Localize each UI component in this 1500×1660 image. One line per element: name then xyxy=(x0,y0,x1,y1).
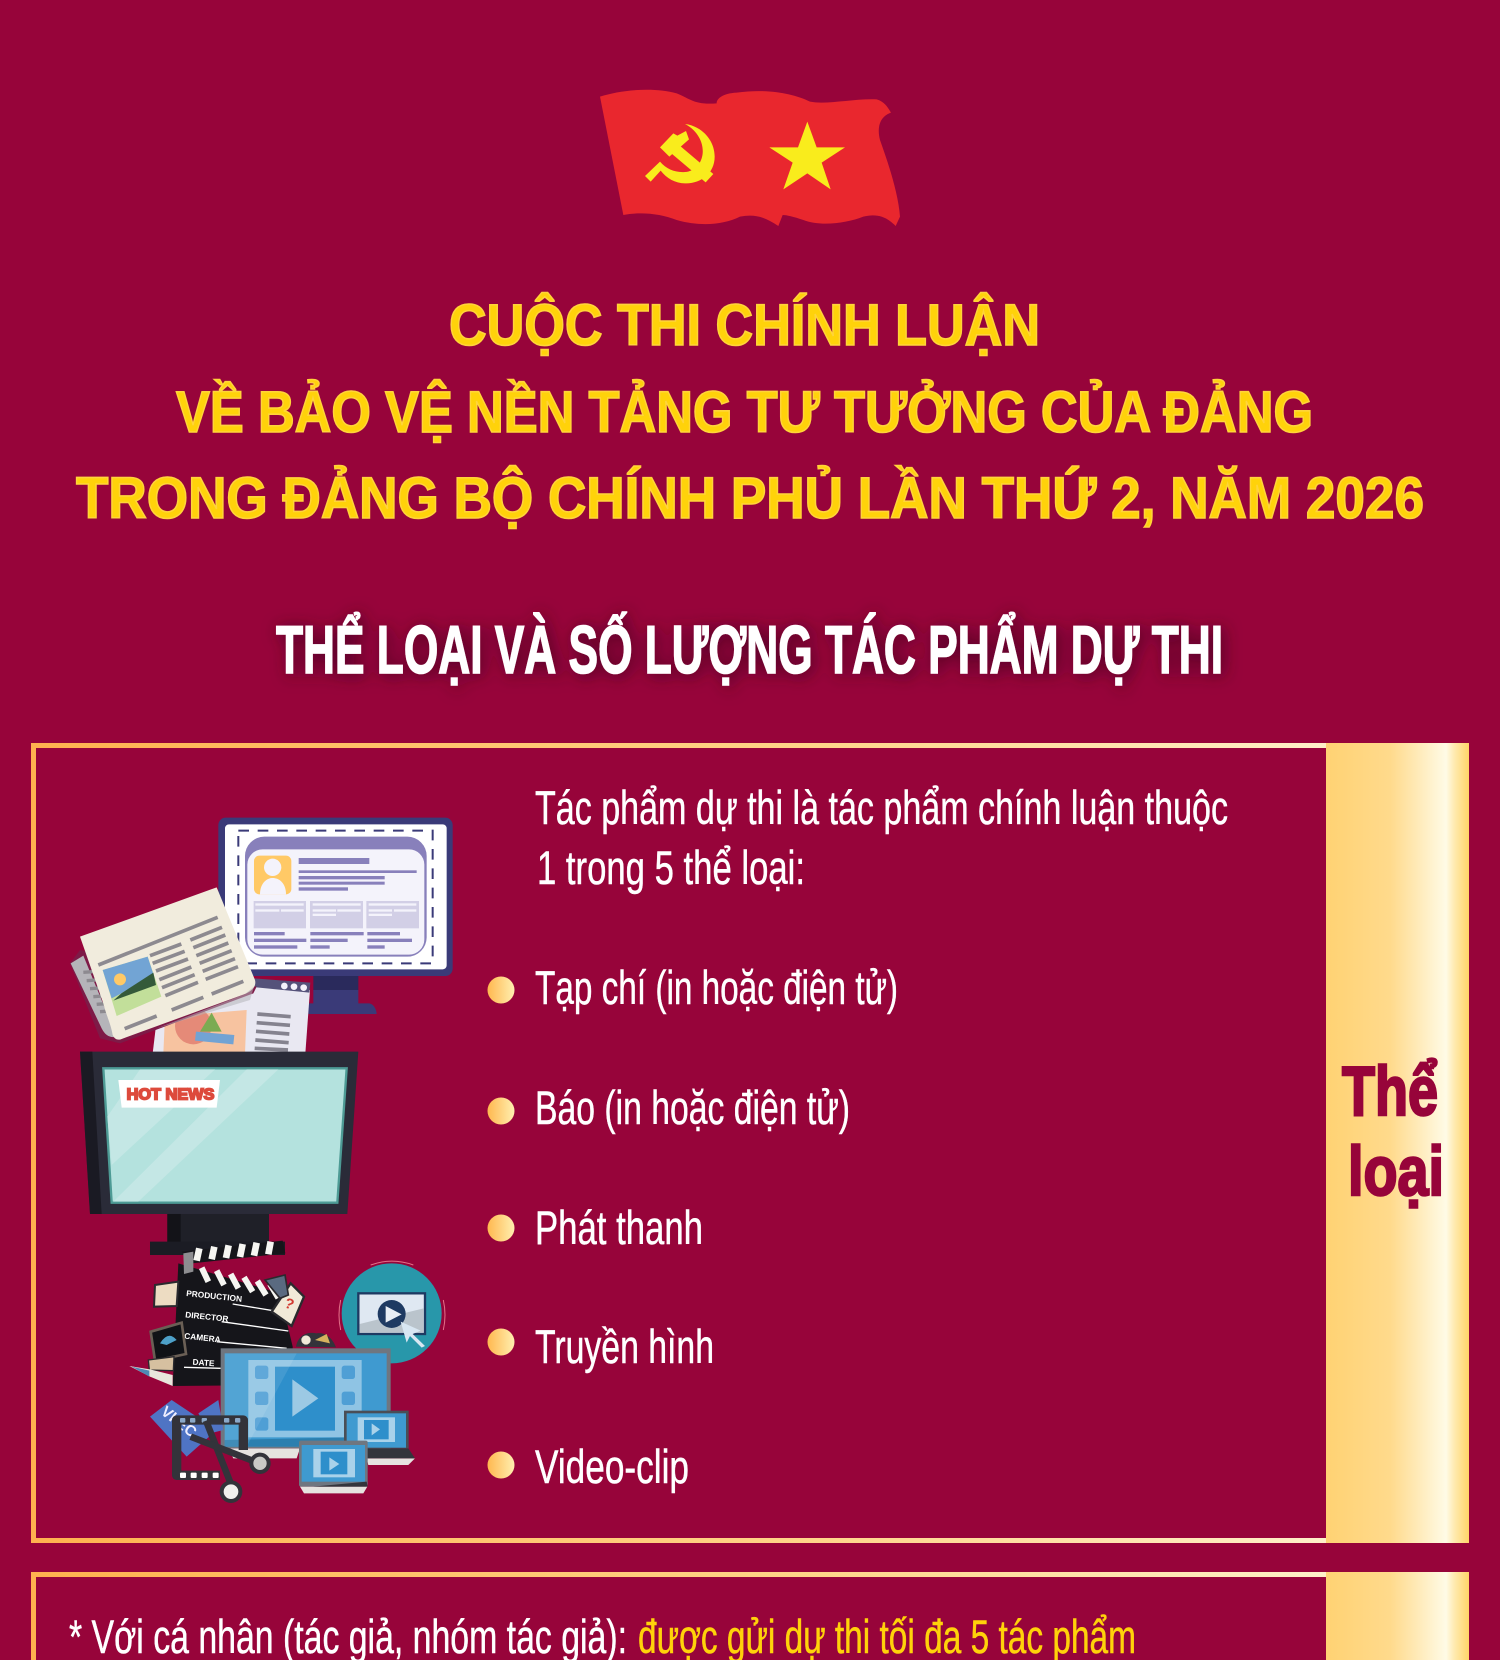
side tab: loại xyxy=(1348,1132,1444,1210)
frame xyxy=(34,1574,1466,1660)
frame xyxy=(34,746,1466,1540)
film strips xyxy=(129,1275,336,1386)
newspaper xyxy=(70,887,257,1043)
clapper board xyxy=(173,1241,293,1386)
intro text: 1 trong 5 thể loại: xyxy=(537,841,805,894)
list of genres: Truyền hình xyxy=(535,1320,714,1373)
icon: television hot news: HOT NEWS xyxy=(127,1086,214,1103)
icon: computer, newspaper and web page xyxy=(70,818,453,1053)
panel: genres xyxy=(34,743,1469,1543)
clapper board: DATE xyxy=(192,1357,215,1368)
tablet right xyxy=(344,1411,415,1465)
web page xyxy=(153,978,310,1053)
list of genres: Phát thanh xyxy=(535,1201,703,1254)
list of genres: Video-clip xyxy=(535,1440,689,1493)
side tab xyxy=(1326,743,1469,1543)
icon: video production set xyxy=(129,1241,445,1501)
play button circle xyxy=(339,1261,445,1363)
icon: flag xyxy=(600,90,900,226)
list of genres: Tạp chí (in hoặc điện tử) xyxy=(535,961,898,1014)
side tab xyxy=(1326,1572,1469,1660)
scissors and film frame xyxy=(177,1418,269,1501)
list of genres xyxy=(488,961,898,1493)
tablet front xyxy=(299,1441,368,1493)
clapper board: CAMERA xyxy=(184,1331,221,1344)
list of genres: Báo (in hoặc điện tử) xyxy=(535,1081,850,1134)
clapper board: PRODUCTION xyxy=(186,1288,243,1304)
clapper board: DIRECTOR xyxy=(185,1309,229,1324)
intro text: Tác phẩm dự thi là tác phẩm chính luận thuộc xyxy=(535,781,1228,834)
icon: television hot news xyxy=(80,1052,358,1244)
title xyxy=(76,293,1424,531)
video tags: VI EC xyxy=(158,1403,200,1441)
laptop video xyxy=(221,1348,391,1458)
intro text xyxy=(535,781,1228,894)
film strips: ? xyxy=(282,1296,296,1314)
panel: number of entries xyxy=(34,1572,1469,1660)
video tags xyxy=(150,1400,223,1457)
title: VỀ BẢO VỆ NỀN TẢNG TƯ TƯỞNG CỦA ĐẢNG xyxy=(176,380,1313,445)
title: CUỘC THI CHÍNH LUẬN xyxy=(449,293,1040,358)
side tab: Thể xyxy=(1342,1052,1438,1130)
